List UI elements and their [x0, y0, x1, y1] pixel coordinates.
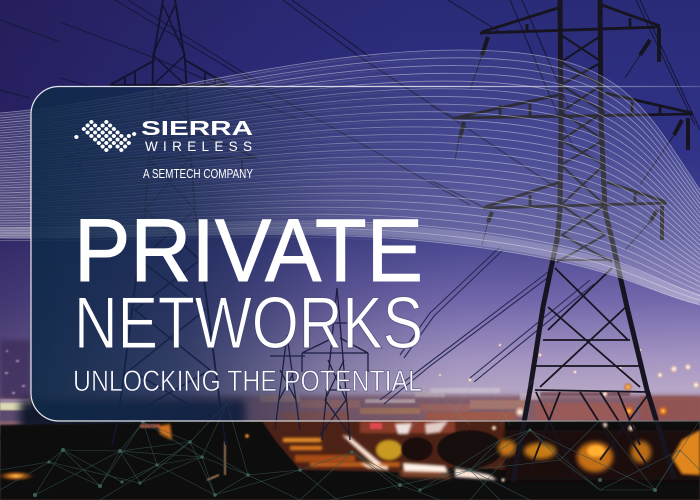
- tower legs: [513, 0, 561, 482]
- upper lattice bracing: [557, 35, 612, 262]
- subtitle: UNLOCKING THE POTENTIAL: [73, 365, 422, 398]
- flowing wave of fine lines: [0, 50, 700, 308]
- title: networks: NETWORKS: [74, 283, 423, 364]
- logo: WIRELESS: [145, 139, 252, 154]
- title: private: PRIVATE: [74, 200, 423, 300]
- rear towers centre: [270, 288, 368, 440]
- city lights band: [0, 340, 700, 436]
- main transmission tower: [453, 0, 693, 482]
- small lights: [0, 471, 34, 481]
- top crossarm: [480, 5, 660, 33]
- ground silhouette: [0, 421, 700, 500]
- insulators: [460, 28, 688, 240]
- lower crossarm: [483, 182, 667, 208]
- tagline: A SEMTECH COMPANY: [143, 167, 254, 181]
- lit town centre: [262, 421, 505, 474]
- town lights, trees and road trails: [0, 421, 700, 482]
- logo: [76, 117, 253, 154]
- rear tower left: [63, 0, 257, 445]
- translucent title panel: [31, 86, 700, 421]
- logo wordmark: SIERRA: [141, 117, 253, 140]
- trees: [376, 440, 402, 460]
- logo mark: [76, 122, 134, 150]
- lower lattice bracing: [520, 260, 650, 475]
- network mesh overlay: [0, 372, 700, 500]
- middle crossarm: [453, 93, 693, 118]
